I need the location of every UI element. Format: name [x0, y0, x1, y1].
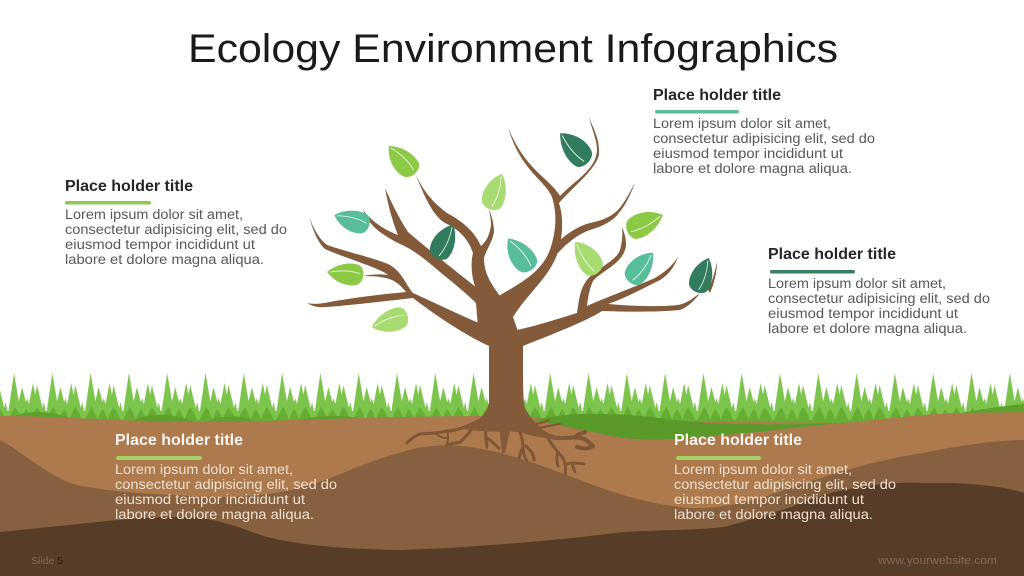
- leaf: green right: [622, 204, 668, 242]
- text block: left: [65, 178, 287, 267]
- footer: slide number: Slide 5: [31, 555, 63, 567]
- text block: bottom left: eiusmod tempor incididunt ut: [115, 492, 305, 507]
- text block: top right: consectetur adipisicing elit, sed do: [653, 131, 875, 146]
- text block: bottom right: eiusmod tempor incididunt ut: [674, 492, 864, 507]
- leaf: pale centre: [479, 170, 512, 213]
- leaf: pale falling: [368, 305, 411, 338]
- leaf: pale centre right: [566, 235, 607, 280]
- text block: bottom left: Place holder title: [115, 432, 243, 449]
- footer: website: www.yourwebsite.com: [877, 555, 997, 567]
- leaf: dark far right: [686, 254, 719, 296]
- text block: top right: Place holder title: [653, 87, 781, 104]
- leaf: dark centre left: [426, 219, 463, 263]
- text block: left: Place holder title: [65, 178, 193, 195]
- far left branch: [307, 217, 489, 346]
- middle branch: [415, 173, 503, 300]
- trunk: [460, 340, 567, 439]
- text block: right: Place holder title: [768, 246, 896, 263]
- text block: top right: eiusmod tempor incididunt ut: [653, 146, 843, 161]
- leaf: dark top: [552, 125, 597, 171]
- text block: bottom left: labore et dolore magna aliqua.: [115, 507, 314, 522]
- grass mound over soil: [533, 414, 841, 439]
- taproot: [499, 426, 511, 453]
- text block: left: consectetur adipisicing elit, sed do: [65, 222, 287, 237]
- text block: bottom right: Place holder title: [674, 432, 802, 449]
- title: Ecology Environment Infographics: [188, 27, 838, 71]
- main right branch: [497, 117, 599, 317]
- right lower branch: [517, 227, 700, 346]
- tree: [307, 117, 717, 475]
- text block: bottom left: Lorem ipsum dolor sit amet,: [115, 462, 293, 477]
- leaf: green top left: [380, 138, 423, 182]
- left branch: [363, 188, 482, 305]
- leaves: [326, 125, 719, 338]
- leaf: green far left: [326, 262, 364, 286]
- text block: bottom left: consectetur adipisicing elit, sed do: [115, 477, 337, 492]
- text block: top right: Lorem ipsum dolor sit amet,: [653, 116, 831, 131]
- soil layer: middle: [0, 440, 1024, 576]
- text block: bottom left: [115, 432, 337, 522]
- text block: right: [768, 246, 990, 336]
- roots: [407, 420, 593, 475]
- leaf: teal right: [620, 245, 661, 289]
- leaf: teal left: [331, 205, 372, 236]
- text block: right: labore et dolore magna aliqua.: [768, 321, 967, 336]
- text block: left: eiusmod tempor incididunt ut: [65, 237, 255, 252]
- text block: right: eiusmod tempor incididunt ut: [768, 306, 958, 321]
- text block: right: consectetur adipisicing elit, sed do: [768, 291, 990, 306]
- text block: top right: [653, 87, 875, 176]
- right upper branch: [556, 183, 635, 253]
- text block: bottom right: Lorem ipsum dolor sit amet,: [674, 462, 852, 477]
- text block: right: Lorem ipsum dolor sit amet,: [768, 276, 946, 291]
- text block: top right: labore et dolore magna aliqua.: [653, 161, 852, 176]
- text block: left: labore et dolore magna aliqua.: [65, 252, 264, 267]
- text block: bottom right: consectetur adipisicing elit, sed do: [674, 477, 896, 492]
- far right twig: [708, 262, 717, 293]
- text block: bottom right: [674, 432, 896, 522]
- soil layer: deep: [0, 483, 1024, 576]
- grass band: [0, 370, 1024, 430]
- soil layer: topsoil: [0, 412, 1024, 576]
- text block: bottom right: labore et dolore magna aliqua.: [674, 507, 873, 522]
- leaf: teal centre: [498, 232, 541, 277]
- text block: left: Lorem ipsum dolor sit amet,: [65, 207, 243, 222]
- crown: [475, 290, 523, 346]
